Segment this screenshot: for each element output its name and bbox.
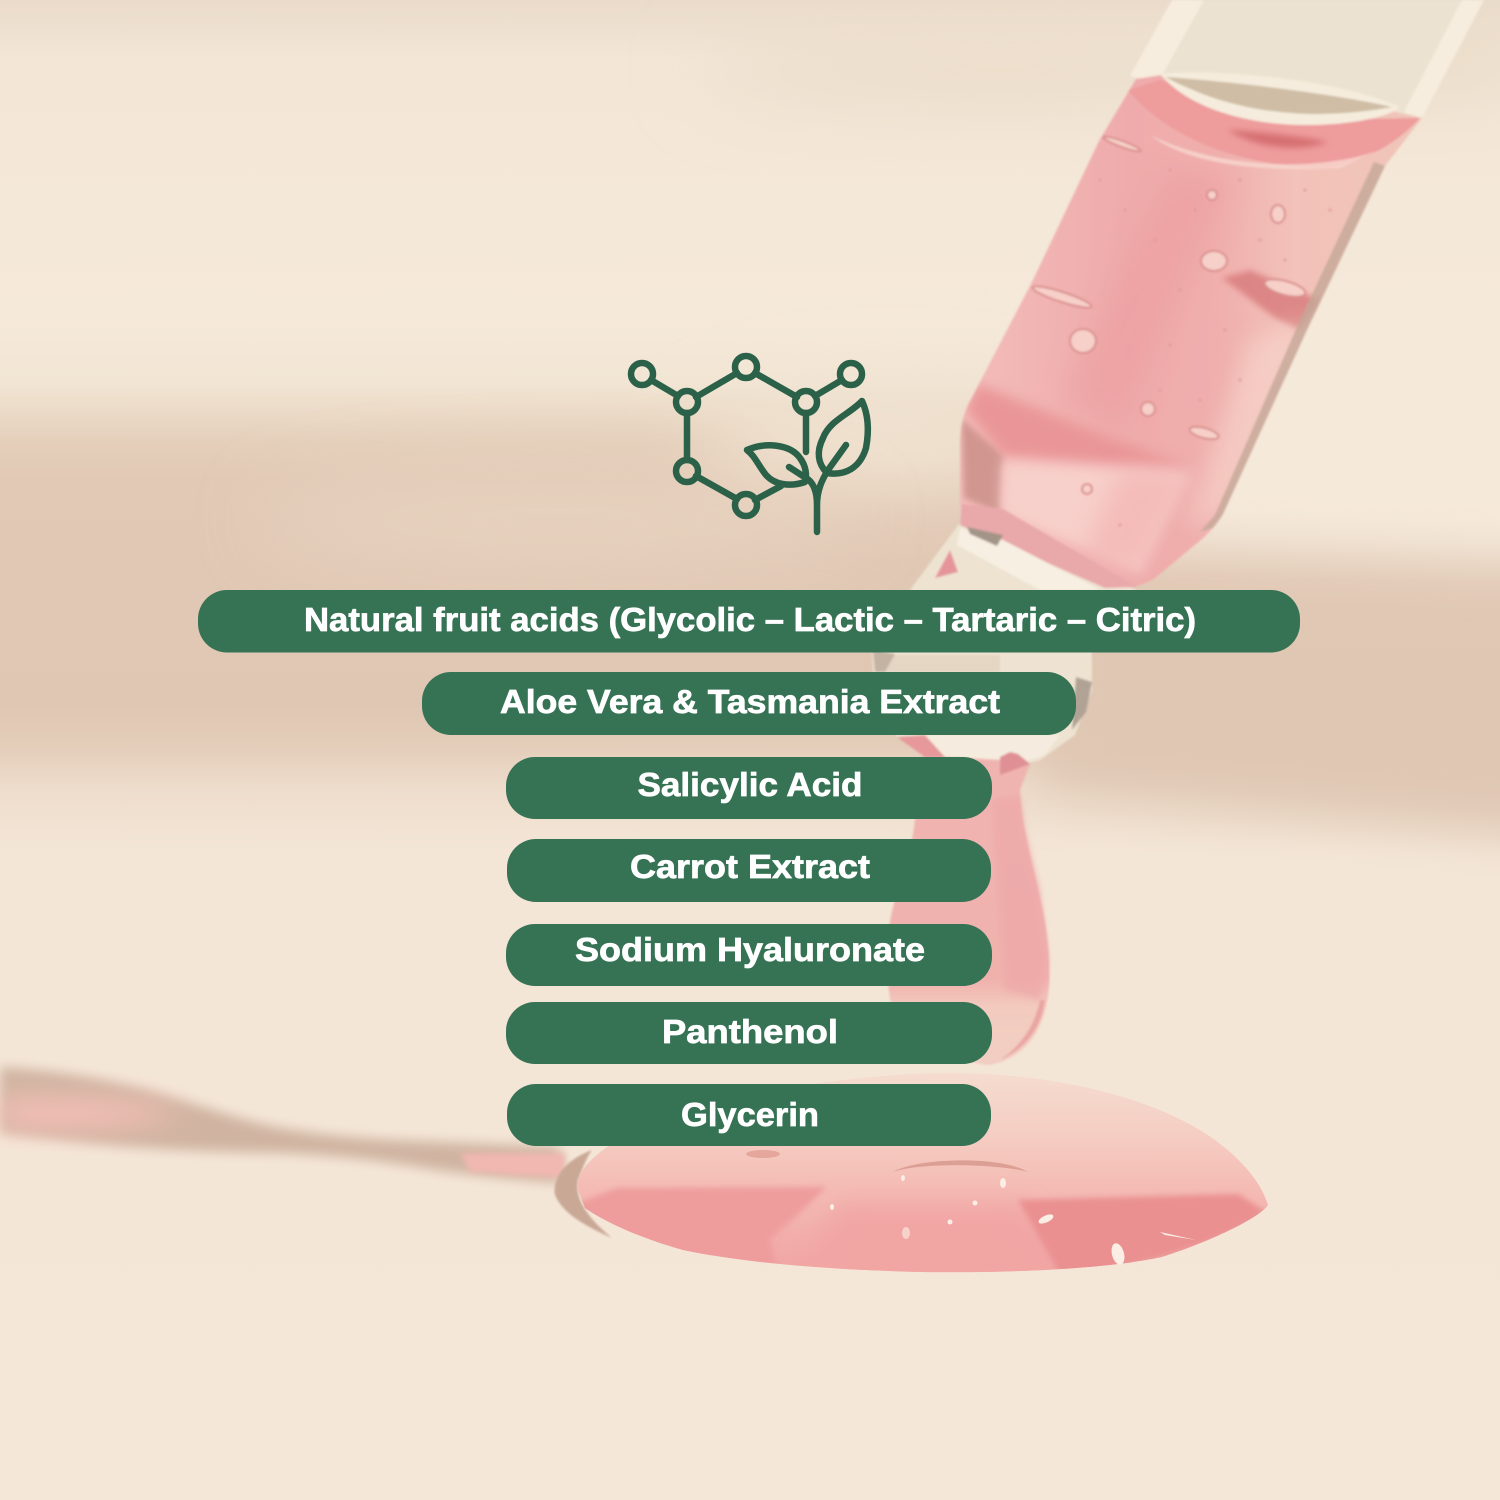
puddle: highlights <box>830 1175 1196 1266</box>
pill: Aloe Vera and Tasmania Extract <box>422 672 1076 735</box>
puddle: lower centre <box>799 1204 1067 1272</box>
dropper: pink liquid <box>950 70 1430 600</box>
puddle: dome <box>578 1073 1268 1272</box>
pill: Aloe Vera and Tasmania Extract: Aloe Vera & Tasmania Extract <box>500 683 1000 720</box>
dropper: meniscus <box>1160 72 1400 125</box>
icon: molecule with plant <box>631 356 868 532</box>
pill: Natural fruit acids: Natural fruit acids (Glycolic – Lactic – Tartaric – Citric) <box>304 601 1196 638</box>
dropper: glass neck <box>872 520 1137 770</box>
dropper: dark reflections <box>966 382 1169 465</box>
photo: glass dropper with pink serum <box>872 0 1484 1065</box>
photo: serum puddle <box>554 1073 1268 1272</box>
molecule nodes <box>631 356 862 516</box>
dropper: dark right edge <box>1200 162 1385 532</box>
molecule bonds <box>651 373 842 500</box>
puddle: dark wedge right <box>1018 1194 1266 1274</box>
plant: left leaf <box>747 445 806 485</box>
pill: Carrot Extract <box>507 839 991 902</box>
pill: Sodium Hyaluronate <box>506 924 992 986</box>
dropper: dark vertical shading <box>1080 188 1206 406</box>
pill: Salicylic Acid: Salicylic Acid <box>638 766 862 803</box>
dropper: empty glass tube <box>1136 0 1484 118</box>
plant: right leaf <box>819 401 868 474</box>
dropper: saturated meniscus band <box>1128 80 1420 168</box>
puddle: saturated lower-left section <box>582 1185 825 1264</box>
photo: serum shadow streak on surface <box>0 1067 565 1183</box>
pill: Sodium Hyaluronate: Sodium Hyaluronate <box>575 931 925 968</box>
dropper: micro bubbles <box>1098 168 1332 526</box>
puddle: rim shadow <box>555 1150 612 1238</box>
pill: Natural fruit acids <box>198 590 1300 652</box>
dropper: drop neck and hanging drop <box>887 752 1050 1065</box>
pill: Carrot Extract: Carrot Extract <box>630 848 870 885</box>
pill: Panthenol: Panthenol <box>662 1013 838 1050</box>
pill: Panthenol <box>506 1002 992 1064</box>
pill: Salicylic Acid <box>506 757 992 819</box>
dropper: bubbles <box>1031 134 1307 494</box>
pill: Glycerin: Glycerin <box>681 1096 819 1133</box>
puddle: surface bubble <box>893 1160 1028 1172</box>
plant: stem <box>789 445 846 532</box>
pill: Glycerin <box>507 1084 991 1146</box>
